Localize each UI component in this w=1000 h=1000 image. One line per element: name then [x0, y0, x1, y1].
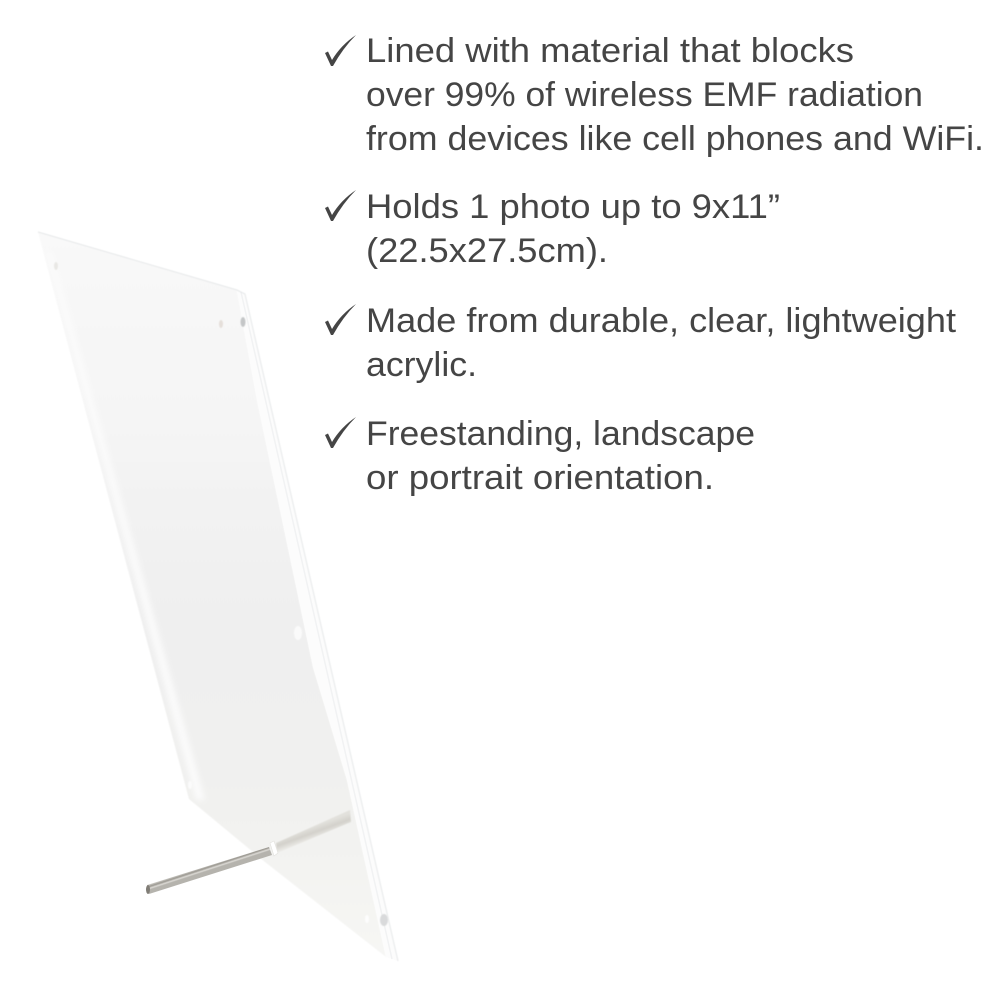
- feature 4: [325, 415, 755, 497]
- feature 3 text: [366, 302, 957, 384]
- feature 2: [325, 188, 780, 270]
- rod tip: [146, 885, 150, 894]
- frame corner screws: [54, 262, 388, 926]
- rear stand rod seen through frame: [276, 810, 351, 853]
- icon: check mark: [325, 190, 356, 221]
- frame left edge highlight: [133, 560, 202, 798]
- feature 4 text: or portrait orientation.: [366, 459, 714, 497]
- frame edge lines: [241, 292, 392, 959]
- feature 1 text: [366, 32, 984, 158]
- feature 1: [325, 32, 984, 158]
- feature 1 text: Lined with material that blocks: [366, 32, 854, 70]
- feature 3 text: Made from durable, clear, lightweight: [366, 302, 957, 340]
- acrylic photo frame: [38, 232, 398, 961]
- frame front panel: [38, 232, 386, 957]
- frame side edge: [237, 290, 398, 961]
- icon: check mark: [325, 304, 356, 335]
- icon: check mark: [325, 35, 356, 66]
- feature list: [325, 32, 984, 497]
- feature 3 text: acrylic.: [366, 346, 477, 384]
- feature 2 text: [366, 188, 780, 270]
- feature 3: [325, 302, 957, 384]
- feature 2 text: Holds 1 photo up to 9x11”: [366, 188, 780, 226]
- feature 1 text: over 99% of wireless EMF radiation: [366, 76, 923, 114]
- icon: check mark: [325, 417, 356, 448]
- rod collar: [270, 841, 278, 856]
- stand rod: [147, 847, 272, 894]
- feature 2 text: (22.5x27.5cm).: [366, 232, 608, 270]
- frame top highlight: [38, 232, 398, 961]
- feature 4 text: [366, 415, 755, 497]
- feature 4 text: Freestanding, landscape: [366, 415, 755, 453]
- feature 1 text: from devices like cell phones and WiFi.: [366, 120, 984, 158]
